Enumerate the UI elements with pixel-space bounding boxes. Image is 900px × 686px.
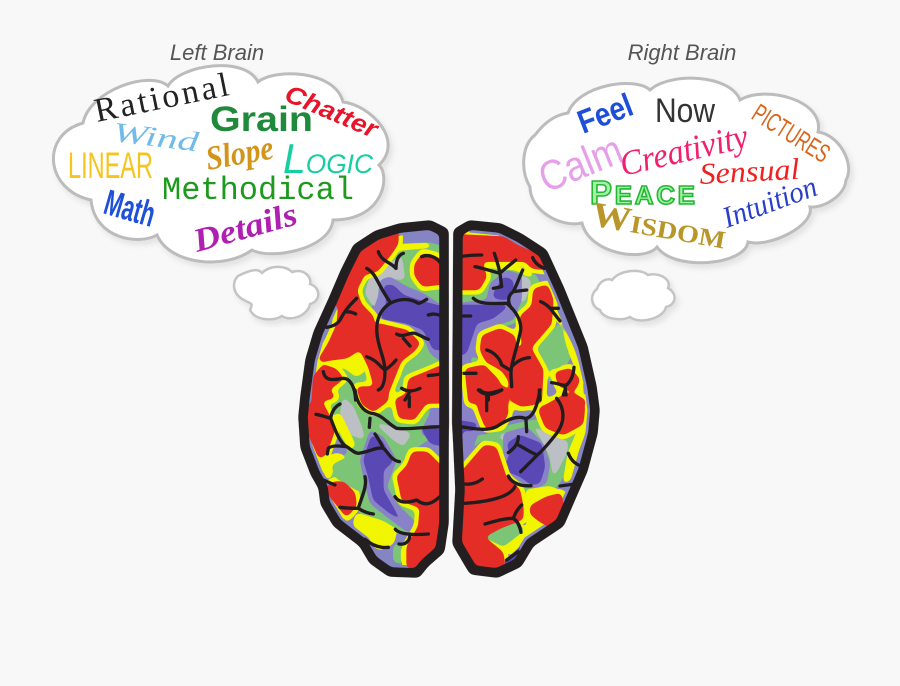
brain illustration <box>295 215 600 580</box>
red zones <box>308 230 585 572</box>
word: Feel: Feel <box>572 86 638 141</box>
word: Calm: Calm <box>532 126 629 201</box>
purple lobe at lower right <box>505 546 520 564</box>
word: Now: Now <box>655 92 715 130</box>
word: Peace: PEACE <box>590 174 695 211</box>
word: LINEAR: LINEAR <box>68 145 153 186</box>
word: Sensual: Sensual <box>699 153 800 191</box>
title: left brain: Left Brain <box>170 40 264 65</box>
word: Grain: Grain <box>210 100 313 139</box>
brain colour map <box>308 230 590 568</box>
word: Slope: Slope <box>203 130 276 178</box>
brain veins <box>316 252 583 560</box>
small thought cloud: right <box>592 271 675 320</box>
title: right brain: Right Brain <box>628 40 736 65</box>
lavender rim along the outer edge <box>303 225 595 573</box>
word: Math: Math <box>100 181 160 235</box>
word: Methodical: Methodical <box>162 172 354 209</box>
grey zones <box>340 255 568 478</box>
green zones <box>327 243 577 563</box>
hemisphere outlines <box>303 225 595 573</box>
yellow zones <box>318 243 586 563</box>
word: Intuition: Intuition <box>717 170 821 235</box>
late green zones over yellow <box>332 330 569 547</box>
word: Wisdom: WISDOM <box>589 194 729 256</box>
light purple zones <box>360 270 550 532</box>
word: Details: Details <box>188 197 301 260</box>
thought cloud: right brain <box>524 78 849 263</box>
thought cloud: left brain <box>53 66 388 262</box>
word: Logic: LOGIC <box>283 135 373 182</box>
dark purple zones <box>363 277 545 527</box>
word: Chatter: Chatter <box>281 80 383 144</box>
word: Wind: Wind <box>111 117 202 159</box>
small thought cloud: left <box>234 267 318 319</box>
word: Pictures: PICTURES <box>747 98 836 169</box>
word: Creativity: Creativity <box>616 116 752 184</box>
word: Rational: Rational <box>91 66 232 130</box>
yellow halos around red zones <box>308 230 585 572</box>
